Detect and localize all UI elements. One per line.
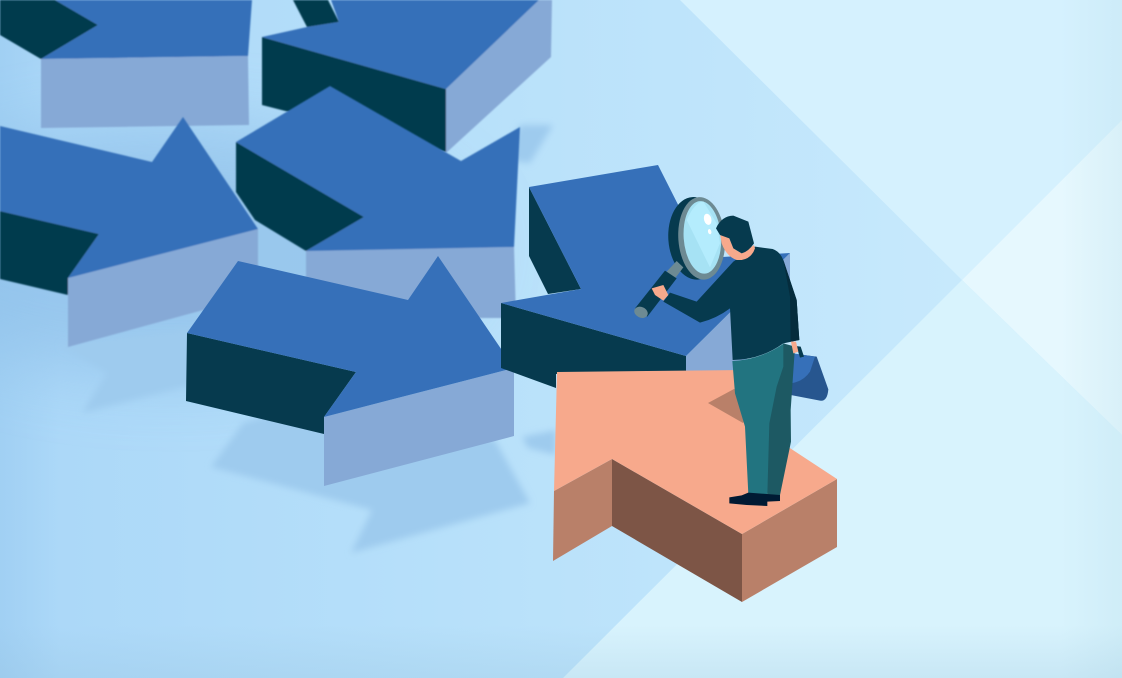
person with magnifier	[632, 195, 828, 506]
magnifier	[632, 195, 728, 320]
icon: briefcase	[791, 346, 828, 401]
hand	[652, 285, 668, 301]
arrow: top left	[0, 0, 252, 128]
shoes	[729, 493, 780, 506]
arrow shadows	[60, 125, 556, 553]
head	[716, 216, 755, 260]
arrow: centre front	[186, 256, 514, 486]
arrow: top centre	[262, 0, 552, 153]
arrow: middle left	[0, 117, 258, 347]
hand on bag	[791, 342, 798, 353]
arrow: centre back	[236, 86, 520, 318]
sweater	[663, 247, 799, 360]
arrow: orange highlighted	[553, 370, 837, 602]
pants	[732, 343, 795, 495]
arrow: behind person	[501, 165, 790, 388]
